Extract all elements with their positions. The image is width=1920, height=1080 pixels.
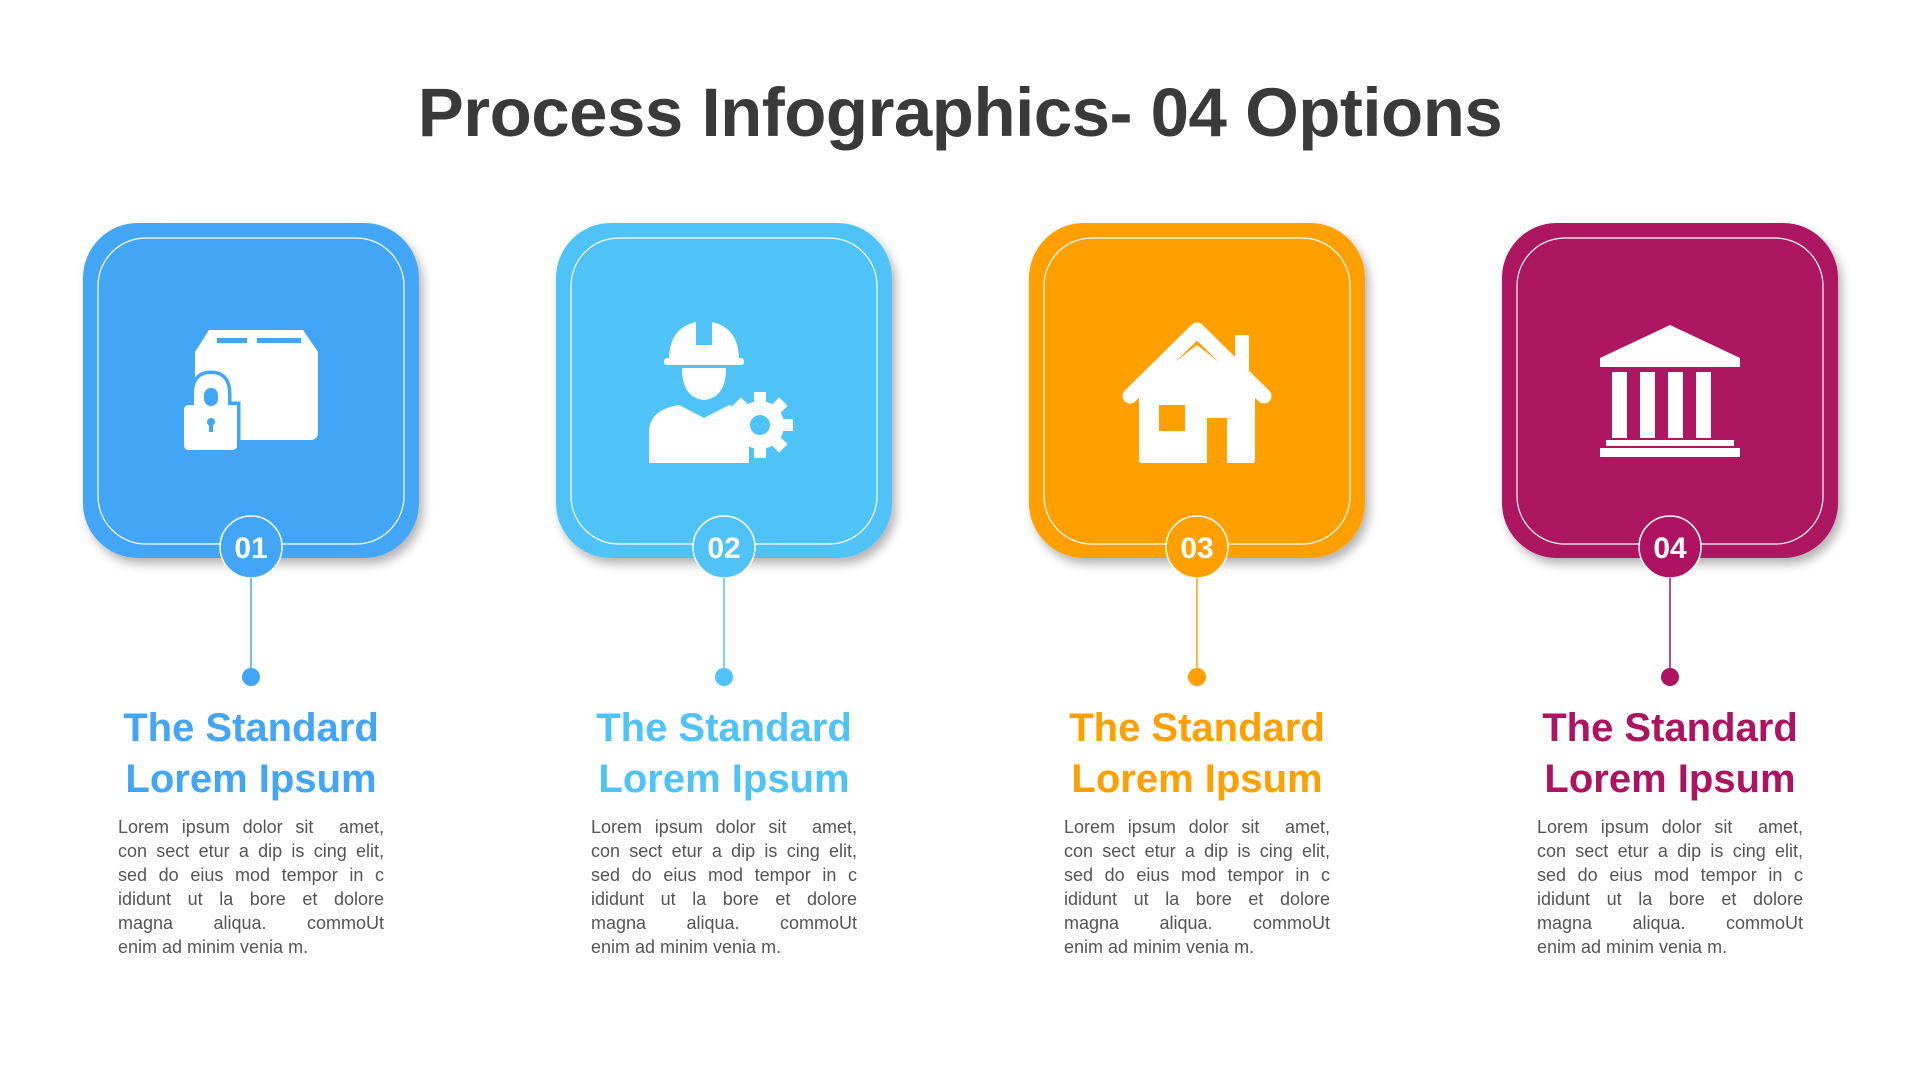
text 1: ididunt ut la bore et dolore: [118, 889, 384, 909]
text 2: magna aliqua. commoUt: [591, 913, 857, 933]
text 4: Lorem ipsum dolor sit amet,: [1537, 817, 1803, 837]
text 2: con sect etur a dip is cing elit,: [591, 841, 857, 861]
number badge 03: 03: [1180, 532, 1214, 565]
text 4: con sect etur a dip is cing elit,: [1537, 841, 1803, 861]
number badge 01: [220, 516, 282, 578]
text 3: sed do eius mod tempor in c: [1064, 865, 1330, 885]
number badge 01: 01: [234, 532, 268, 565]
card 1: [83, 223, 419, 686]
text 2: sed do eius mod tempor in c: [591, 865, 857, 885]
text 4: sed do eius mod tempor in c: [1537, 865, 1803, 885]
text 1: [118, 817, 384, 957]
icon: worker with gear: [649, 322, 793, 463]
icon: house: [1130, 330, 1264, 463]
heading 2: [596, 706, 852, 801]
text 3: magna aliqua. commoUt: [1064, 913, 1330, 933]
number badge 04: [1639, 516, 1701, 578]
text 2: ididunt ut la bore et dolore: [591, 889, 857, 909]
text 3: [1064, 817, 1330, 957]
text 1: enim ad minim venia m.: [118, 937, 308, 957]
text 1: con sect etur a dip is cing elit,: [118, 841, 384, 861]
icon: box with lock: [184, 330, 318, 450]
text 3: con sect etur a dip is cing elit,: [1064, 841, 1330, 861]
number badge 02: [693, 516, 755, 578]
text 4: [1537, 817, 1803, 957]
heading 2: Lorem Ipsum: [598, 757, 850, 801]
number badge 02: 02: [707, 532, 741, 565]
number badge 04: 04: [1653, 532, 1687, 565]
text 3: ididunt ut la bore et dolore: [1064, 889, 1330, 909]
text 2: [591, 817, 857, 957]
title: Process Infographics- 04 Options: [418, 74, 1502, 151]
text 1: sed do eius mod tempor in c: [118, 865, 384, 885]
heading 3: [1069, 706, 1325, 801]
heading 4: [1542, 706, 1798, 801]
card 4: [1502, 223, 1838, 686]
text 1: magna aliqua. commoUt: [118, 913, 384, 933]
card 2: [556, 223, 892, 686]
text 3: Lorem ipsum dolor sit amet,: [1064, 817, 1330, 837]
heading 3: The Standard: [1069, 706, 1325, 750]
icon: bank building: [1600, 325, 1740, 457]
text 2: Lorem ipsum dolor sit amet,: [591, 817, 857, 837]
heading 1: The Standard: [123, 706, 379, 750]
text 1: Lorem ipsum dolor sit amet,: [118, 817, 384, 837]
text 4: magna aliqua. commoUt: [1537, 913, 1803, 933]
heading 1: Lorem Ipsum: [125, 757, 377, 801]
card 3: [1029, 223, 1365, 686]
text 2: enim ad minim venia m.: [591, 937, 781, 957]
number badge 03: [1166, 516, 1228, 578]
heading 4: The Standard: [1542, 706, 1798, 750]
heading 4: Lorem Ipsum: [1544, 757, 1796, 801]
text 4: enim ad minim venia m.: [1537, 937, 1727, 957]
heading 2: The Standard: [596, 706, 852, 750]
heading 1: [123, 706, 379, 801]
text 3: enim ad minim venia m.: [1064, 937, 1254, 957]
text 4: ididunt ut la bore et dolore: [1537, 889, 1803, 909]
heading 3: Lorem Ipsum: [1071, 757, 1323, 801]
